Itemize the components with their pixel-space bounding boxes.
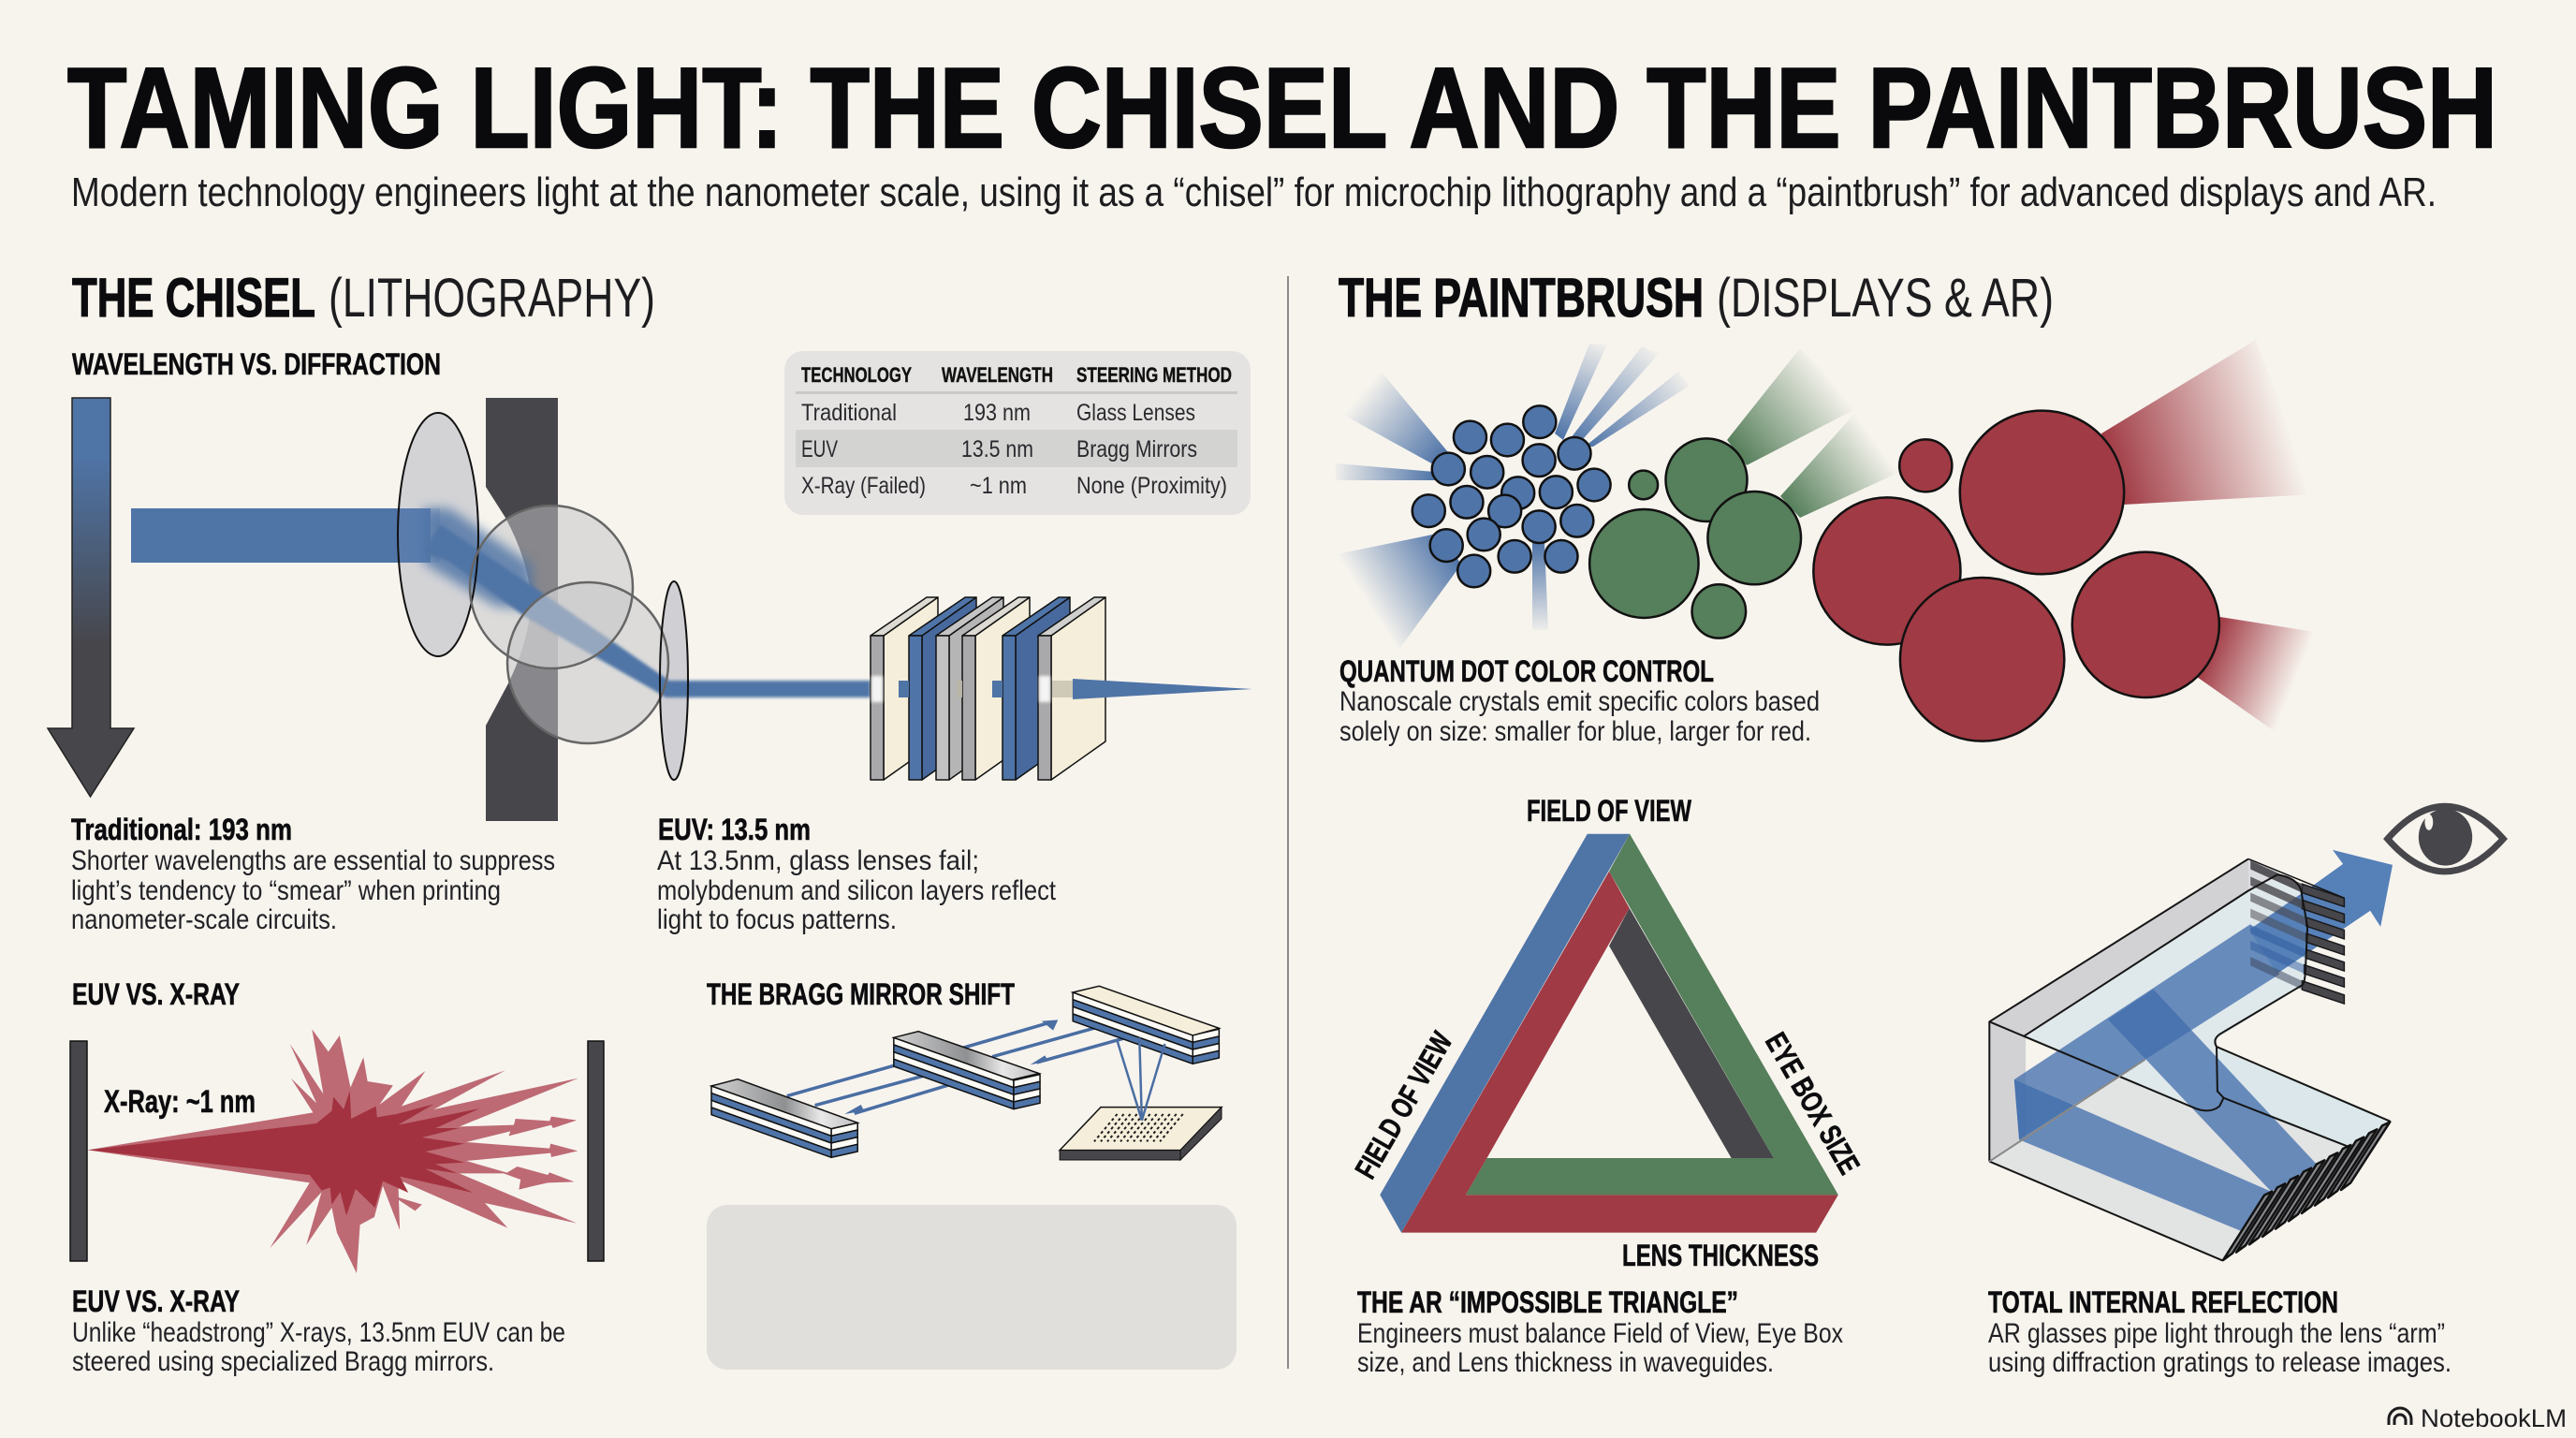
label: field of view side: FIELD OF VIEW [1348, 1026, 1459, 1184]
comparison table: Bragg Mirrors [1076, 436, 1197, 462]
bragg mirrors diagram [711, 986, 1222, 1160]
text block: traditional 193 nm [71, 813, 555, 935]
text block: euv vs x-ray: EUV VS. X-RAY [72, 1284, 240, 1318]
label: x-ray wavelength: X-Ray: ~1 nm [104, 1084, 256, 1120]
text block: euv 13.5 nm: At 13.5nm, glass lenses fail; [657, 845, 979, 876]
text block: euv vs x-ray: Unlike “headstrong” X-rays, 13.5nm EUV can be [72, 1317, 565, 1348]
text block: quantum dot color control: Nanoscale crystals emit specific colors based [1339, 686, 1820, 717]
text block: euv vs x-ray [72, 1284, 565, 1377]
comparison table: 193 nm [963, 400, 1031, 426]
heading: the chisel [72, 268, 655, 329]
heading: euv vs x-ray: EUV VS. X-RAY [72, 977, 240, 1011]
icon: eye [2388, 806, 2503, 872]
heading: the chisel: THE CHISEL [72, 268, 315, 329]
panel: bragg mirror shift [707, 977, 1222, 1160]
text block: ar impossible triangle: size, and Lens thickness in waveguides. [1357, 1347, 1774, 1378]
comparison table: ~1 nm [970, 473, 1027, 499]
blue quantum dots [1412, 405, 1611, 587]
text block: euv 13.5 nm: EUV: 13.5 nm [658, 813, 811, 846]
text block: traditional 193 nm: Traditional: 193 nm [71, 813, 292, 846]
waveguide diagram [1989, 850, 2393, 1261]
text block: ar impossible triangle: Engineers must balance Field of View, Eye Box [1357, 1318, 1843, 1349]
heading: the paintbrush: THE PAINTBRUSH [1339, 268, 1704, 329]
label: eye box size: EYE BOX SIZE [1759, 1027, 1866, 1180]
comparison table: Traditional [801, 400, 897, 426]
output grating stripes [2302, 884, 2344, 1004]
quantum dot diagram [1412, 405, 2219, 741]
focused rays onto chip [1118, 1037, 1164, 1121]
comparison table: TECHNOLOGY [801, 363, 912, 387]
green quantum dots [1589, 438, 1801, 638]
panel: euv vs x-ray burst [70, 977, 604, 1273]
text block: euv vs x-ray: steered using specialized Bragg mirrors. [72, 1346, 494, 1377]
text block: total internal reflection: AR glasses pipe light through the lens “arm” [1988, 1318, 2445, 1349]
light beam [131, 500, 871, 700]
comparison table: STEERING METHOD [1076, 363, 1232, 387]
text block: euv 13.5 nm: molybdenum and silicon layers reflect [657, 875, 1057, 906]
text block: total internal reflection: using diffraction gratings to release images. [1988, 1347, 2452, 1378]
comparison table: None (Proximity) [1076, 473, 1227, 499]
text block: ar impossible triangle: THE AR “IMPOSSIBLE TRIANGLE” [1357, 1285, 1738, 1319]
penrose triangle [1380, 834, 1838, 1233]
red quantum dots [1813, 411, 2219, 741]
green emission rays [1727, 348, 1898, 518]
light beams inside waveguide [2014, 924, 2319, 1233]
comparison table: WAVELENGTH [942, 363, 1053, 387]
icon: notebooklm [2389, 1408, 2411, 1425]
text block: traditional 193 nm: Shorter wavelengths are essential to suppress [71, 845, 555, 876]
text block: quantum dot color control: QUANTUM DOT COLOR CONTROL [1339, 654, 1714, 688]
comparison table: X-Ray (Failed) [801, 473, 926, 499]
beam through plates [871, 676, 1252, 702]
panel: impossible triangle [1348, 794, 1866, 1378]
panel: wavelength vs diffraction [48, 347, 1252, 821]
text block: quantum dot color control: solely on size: smaller for blue, larger for red. [1339, 716, 1811, 747]
text block: total internal reflection: TOTAL INTERNAL REFLECTION [1988, 1285, 2338, 1319]
blue emission rays [1336, 344, 1690, 649]
text block: quantum dot color control [1339, 654, 1820, 747]
label: lens thickness: LENS THICKNESS [1622, 1239, 1819, 1272]
panel: total internal reflection [1988, 806, 2503, 1378]
diffraction slit block [486, 398, 558, 821]
x-ray scatter burst [88, 1029, 578, 1273]
notebooklm watermark [2389, 1404, 2567, 1432]
heading: bragg mirror shift: THE BRAGG MIRROR SHIFT [707, 977, 1015, 1011]
text block: total internal reflection [1988, 1285, 2452, 1378]
bottom input grating [2223, 1122, 2390, 1260]
arrow: decreasing wavelength [48, 398, 134, 797]
text block: ar impossible triangle [1357, 1285, 1843, 1378]
text block: euv 13.5 nm: light to focus patterns. [657, 904, 897, 935]
arrow: light exiting to eye [2249, 850, 2393, 974]
reflected beams [787, 1020, 1137, 1114]
multilayer mirror plates [871, 597, 1105, 780]
lens and diffraction elements [398, 413, 688, 780]
comparison table [784, 351, 1251, 515]
label: notebooklm: NotebookLM [2421, 1404, 2567, 1432]
comparison table: Glass Lenses [1076, 400, 1195, 426]
text block: euv 13.5 nm [657, 813, 1057, 935]
red emission rays [2101, 340, 2315, 732]
wafer chip [1060, 1108, 1222, 1160]
heading: the paintbrush [1339, 268, 2054, 329]
heading: wavelength vs diffraction: WAVELENGTH VS. DIFFRACTION [72, 347, 441, 381]
right wall [588, 1041, 604, 1261]
comparison table: 13.5 nm [961, 436, 1033, 462]
waveguide glass body [1989, 858, 2390, 1261]
text block: traditional 193 nm: light’s tendency to “smear” when printing [71, 875, 501, 906]
text block: traditional 193 nm: nanometer-scale circuits. [71, 904, 337, 935]
heading: the chisel: (LITHOGRAPHY) [329, 268, 655, 329]
mirror one [711, 1079, 857, 1157]
waveguide outline [1989, 858, 2390, 1261]
mirror two [894, 1032, 1040, 1109]
label: field of view top: FIELD OF VIEW [1527, 794, 1692, 828]
left wall [70, 1041, 87, 1261]
empty grey placeholder panel [707, 1205, 1237, 1370]
mirror three [1073, 986, 1219, 1064]
lens and aperture outlines [398, 413, 688, 780]
comparison table: EUV [801, 436, 838, 462]
tinted grating stripes inside glass [2250, 860, 2306, 990]
panel: quantum dots [1336, 340, 2315, 747]
heading: the paintbrush: (DISPLAYS & AR) [1717, 268, 2054, 329]
